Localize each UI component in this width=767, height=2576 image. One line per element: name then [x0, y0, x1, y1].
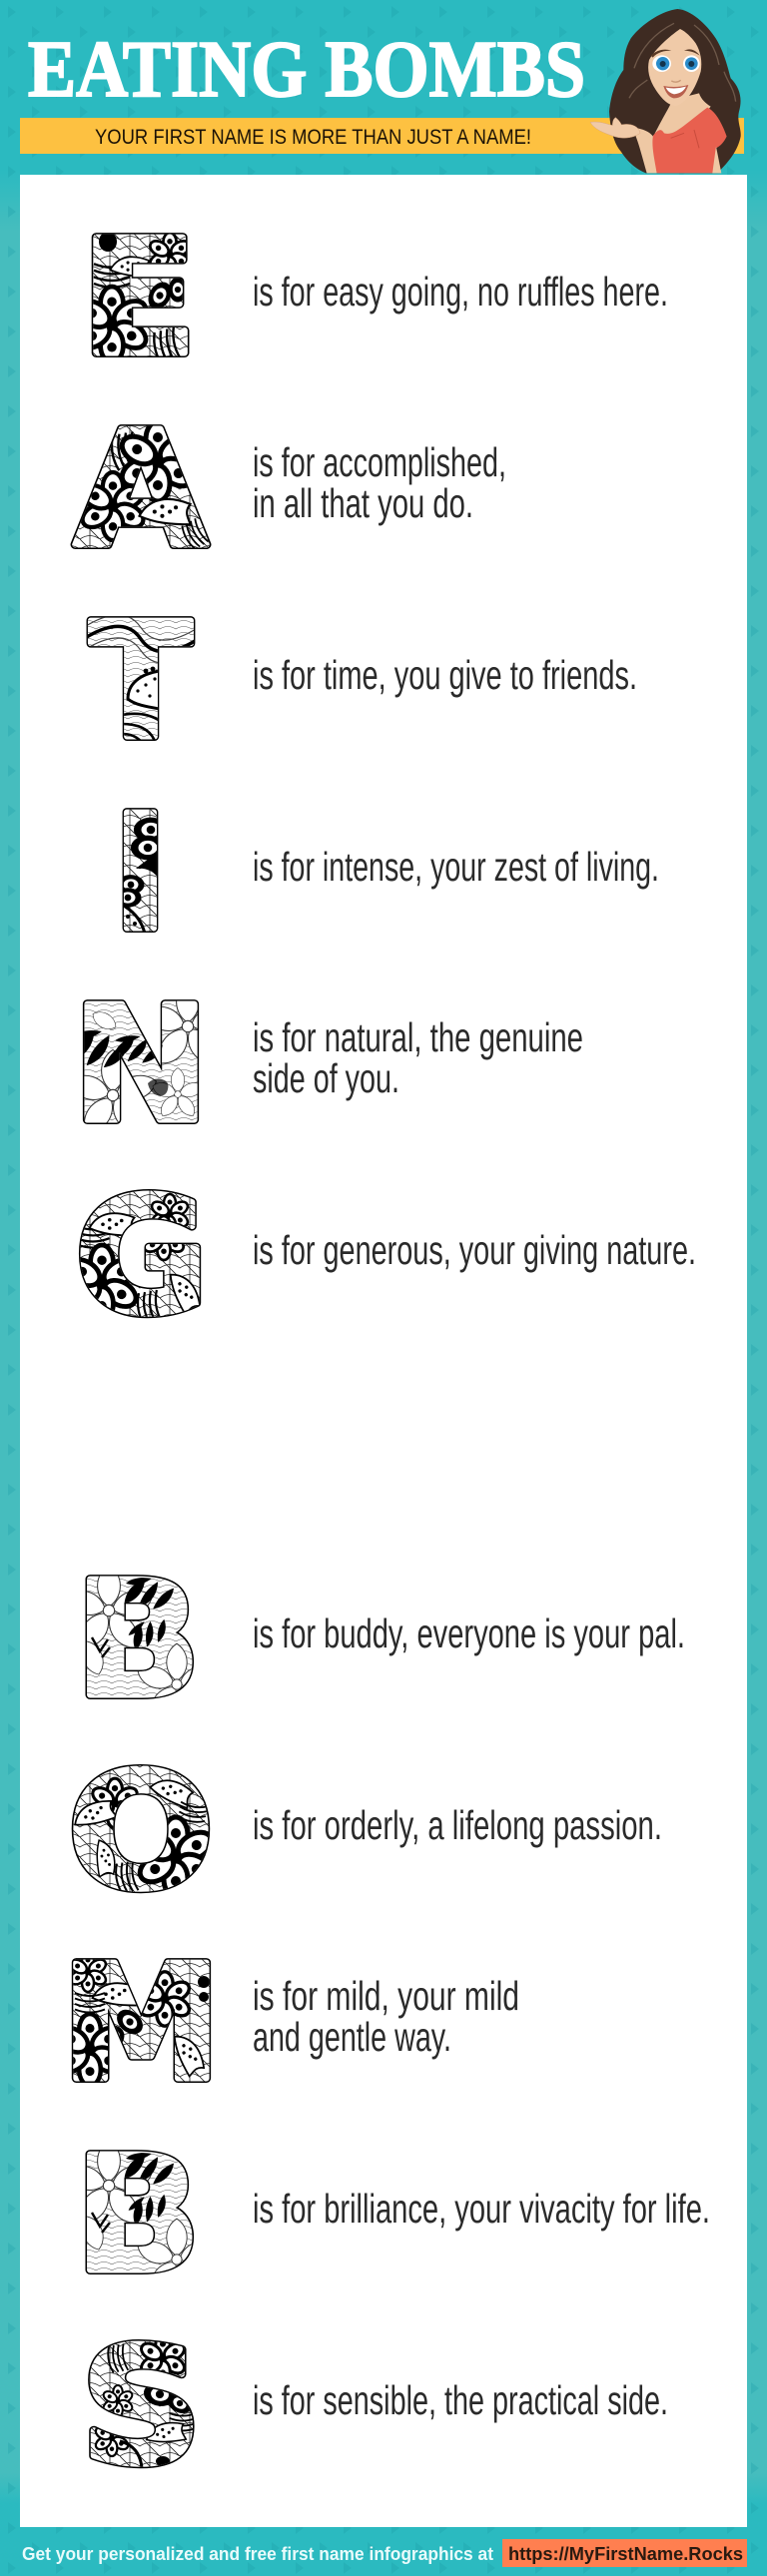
row: I	[122, 808, 657, 933]
letter B	[86, 1575, 194, 1699]
letter B second	[86, 2150, 194, 2274]
letter T: T	[90, 590, 192, 775]
footer link badge	[502, 2539, 747, 2567]
row: M	[72, 1958, 517, 2083]
text: M	[253, 1973, 519, 2060]
letter M: M	[62, 1931, 221, 2116]
row: E	[92, 233, 665, 357]
row: B	[86, 1575, 683, 1699]
letter N	[82, 999, 200, 1124]
letter O	[72, 1764, 210, 1893]
row: B second	[86, 2150, 707, 2274]
row: T	[86, 616, 635, 741]
letter O: O	[68, 1739, 214, 1925]
row: O	[72, 1764, 659, 1893]
letter E: E	[81, 206, 197, 390]
row: A	[70, 424, 503, 549]
row: S	[88, 2339, 665, 2468]
letter I	[122, 808, 158, 933]
letter B: B	[75, 1548, 201, 1733]
letter S	[88, 2339, 195, 2468]
row: N	[82, 999, 582, 1124]
subtitle banner: YOUR FIRST NAME IS MORE THAN JUST A NAME!	[95, 126, 531, 149]
letter E: E	[81, 206, 197, 390]
row: G	[78, 1189, 693, 1318]
letter T	[86, 616, 196, 741]
letter S: S	[81, 2314, 202, 2499]
letter O: O	[68, 1739, 214, 1925]
title: EATING BOMBS	[28, 26, 585, 114]
text: A: in all that you do.	[253, 480, 473, 526]
letter A: A	[75, 397, 207, 583]
illustration: cartoon woman	[590, 9, 741, 173]
letter I: I	[113, 782, 168, 966]
text: N: is for natural, the genuine	[253, 1014, 583, 1060]
footer	[22, 2539, 747, 2567]
footer text: Get your personalized and free first name infographics at	[22, 2544, 493, 2564]
text: N	[253, 1014, 583, 1101]
subtitle banner	[20, 118, 744, 154]
footer link badge: https://MyFirstName.Rocks	[508, 2544, 743, 2564]
letter I: I	[113, 782, 168, 966]
letter N: N	[72, 973, 210, 1158]
text: A	[253, 439, 506, 526]
text: A: is for accomplished,	[253, 439, 506, 485]
letter B second: B	[75, 2123, 201, 2308]
letter T: T	[90, 590, 192, 775]
letter E	[92, 233, 190, 357]
letter M: M	[62, 1931, 221, 2116]
text: M: and gentle way.	[253, 2014, 451, 2060]
letter G: G	[75, 1164, 209, 1349]
letter A: A	[75, 397, 207, 583]
letter A	[70, 424, 212, 549]
text: M: is for mild, your mild	[253, 1973, 519, 2019]
letter G	[78, 1189, 202, 1318]
text: N: side of you.	[253, 1055, 399, 1101]
letter G: G	[75, 1164, 209, 1349]
letter M	[72, 1958, 212, 2083]
letter B: B	[75, 1548, 201, 1733]
letter S: S	[81, 2314, 202, 2499]
letter N: N	[72, 973, 210, 1158]
letter B second: B	[75, 2123, 201, 2308]
